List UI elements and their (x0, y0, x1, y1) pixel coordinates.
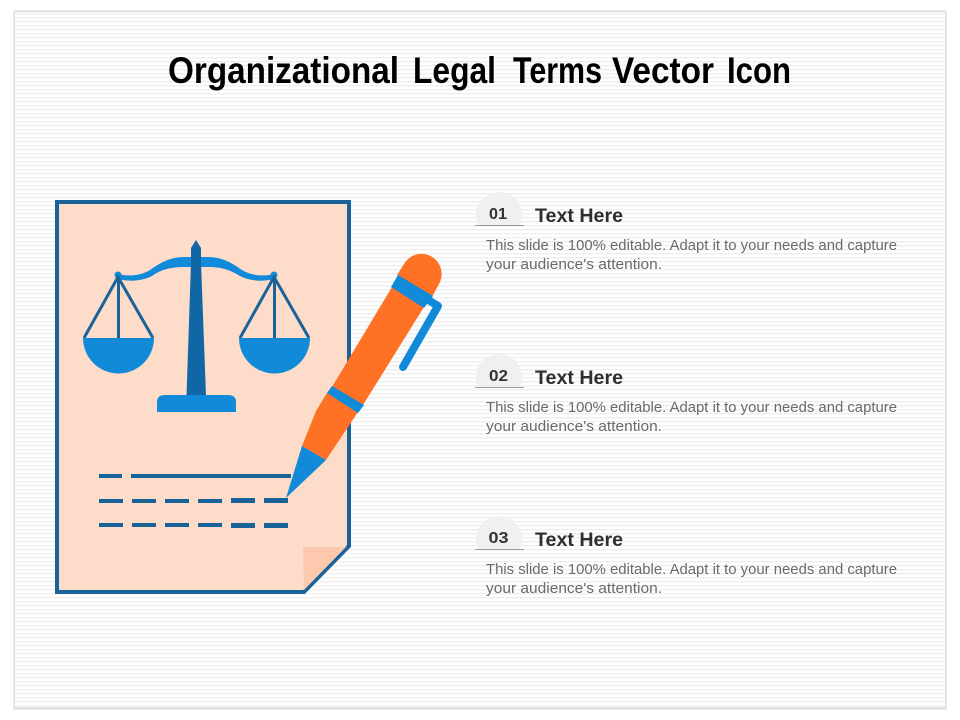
body text: This slide is 100% editable. Adapt it to your needs and capture (486, 237, 897, 254)
body text (486, 399, 897, 435)
icon: scales of justice (83, 240, 310, 412)
beam (118, 257, 274, 281)
right pan (239, 272, 310, 374)
item 03 (475, 516, 897, 597)
number badge (475, 192, 524, 226)
body text: your audience's attention. (486, 418, 662, 435)
title (168, 50, 791, 91)
number badge (475, 354, 524, 388)
title: Vector (612, 50, 714, 91)
post (186, 240, 206, 396)
item 01 (475, 192, 897, 273)
number badge: 01 (489, 206, 507, 223)
pen clip (403, 298, 438, 367)
title: Terms (513, 50, 602, 91)
body text (486, 237, 897, 273)
title: Icon (727, 50, 791, 91)
icon: pen (286, 254, 442, 498)
number badge (475, 516, 524, 550)
number badge: 02 (489, 368, 508, 385)
pen body (302, 287, 424, 460)
body text: your audience's attention. (486, 256, 662, 273)
heading: Text Here (535, 368, 623, 389)
folded corner (303, 547, 346, 590)
pen ring (391, 275, 433, 308)
body text: This slide is 100% editable. Adapt it to your needs and capture (486, 399, 897, 416)
pen cap (397, 254, 442, 297)
item 02 (475, 354, 897, 435)
title: Legal (413, 50, 496, 91)
signature lines (99, 474, 291, 528)
pen nib (286, 446, 326, 498)
title: Organizational (168, 50, 399, 91)
paper sheet (57, 202, 349, 592)
body text: This slide is 100% editable. Adapt it to your needs and capture (486, 561, 897, 578)
document illustration (57, 202, 442, 592)
heading: Text Here (535, 530, 623, 551)
body text: your audience's attention. (486, 580, 662, 597)
left pan (83, 272, 154, 373)
body text (486, 561, 897, 597)
heading: Text Here (535, 206, 623, 227)
number badge: 03 (488, 530, 509, 547)
base (157, 395, 236, 412)
pen band (327, 386, 364, 413)
